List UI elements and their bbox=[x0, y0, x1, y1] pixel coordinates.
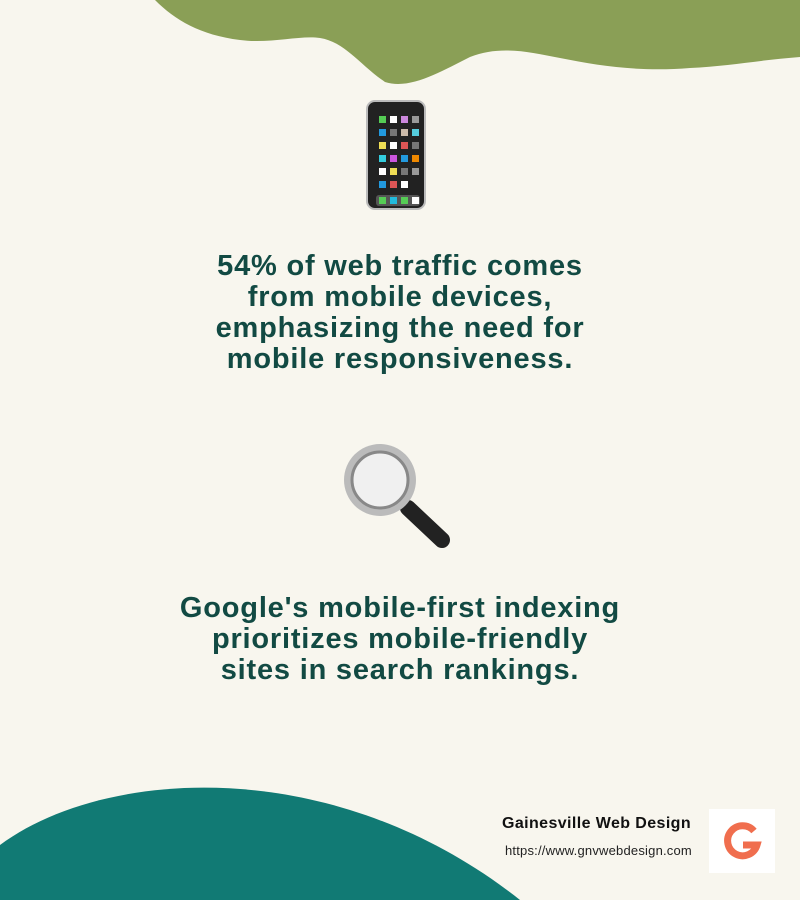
text: mobile traffic: from mobile devices, bbox=[248, 281, 552, 313]
text: google indexing: Google's mobile-first indexing bbox=[180, 592, 620, 624]
text: google indexing bbox=[180, 592, 620, 686]
icon: magnifier bbox=[344, 444, 450, 548]
bottom teal circle bbox=[0, 788, 520, 900]
text: mobile traffic: mobile responsiveness. bbox=[227, 343, 573, 375]
text: mobile traffic bbox=[216, 250, 584, 375]
text: google indexing: prioritizes mobile-friendly bbox=[212, 623, 588, 655]
text: google indexing: sites in search rankings. bbox=[221, 654, 579, 686]
text: mobile traffic: 54% of web traffic comes bbox=[217, 250, 583, 282]
icon: phone bbox=[366, 100, 426, 210]
logo bbox=[709, 809, 775, 873]
url: https://www.gnvwebdesign.com bbox=[505, 843, 692, 858]
brand name: Gainesville Web Design bbox=[502, 815, 691, 832]
text: mobile traffic: emphasizing the need for bbox=[216, 312, 584, 344]
